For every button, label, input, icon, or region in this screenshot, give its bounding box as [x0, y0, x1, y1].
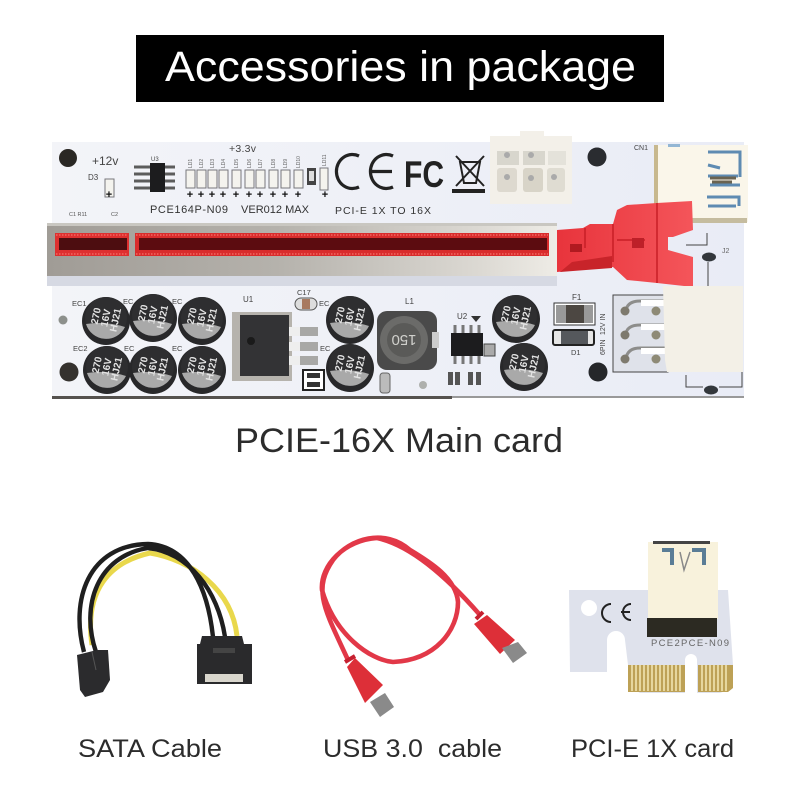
label: USB 3.0 cable: USB 3.0 cable [323, 735, 502, 763]
board silkscreen text: C2 [111, 212, 118, 218]
capacitor EC2: 16V [100, 357, 115, 377]
capacitor EC4 [129, 346, 177, 394]
capacitor EC5: 270 [186, 306, 200, 325]
LED row [105, 168, 328, 201]
board silkscreen text: F1 [572, 293, 582, 302]
capacitor EC10: 16V [517, 354, 532, 374]
capacitor EC4: 16V [146, 357, 161, 377]
capacitor EC1: 270 [90, 306, 104, 325]
board silkscreen text: LD6 [247, 159, 253, 168]
chip U3 [134, 163, 175, 192]
board silkscreen text: D3 [88, 173, 99, 182]
inductor L1: 150 [391, 331, 417, 348]
board silkscreen text: EC2 [73, 344, 88, 353]
capacitor EC2: 270 [91, 355, 105, 374]
PCI-E 1X card illustration [569, 541, 733, 694]
LED row: + [187, 189, 193, 201]
capacitor EC9 [492, 295, 540, 343]
LED row: + [257, 189, 263, 201]
board silkscreen text [69, 143, 730, 357]
title banner [136, 35, 664, 102]
capacitor EC5: HJ21 [204, 307, 220, 333]
LED row: + [209, 189, 215, 201]
capacitor EC7: HJ21 [352, 306, 368, 332]
board silkscreen text: D1 [571, 348, 581, 357]
capacitor EC10 [500, 343, 548, 391]
capacitor EC8: HJ21 [352, 354, 368, 380]
capacitor EC5 [178, 297, 226, 345]
capacitor EC3: 16V [146, 305, 161, 325]
capacitor EC9: HJ21 [518, 305, 534, 331]
board silkscreen text: LD11 [322, 154, 328, 166]
LED row: + [322, 189, 328, 201]
USB 3.0 port [654, 144, 748, 223]
red looped cable [322, 538, 480, 662]
capacitor EC7: 270 [334, 305, 348, 324]
board silkscreen text: EC [172, 297, 183, 306]
board silkscreen text: C17 [297, 288, 311, 297]
title banner: Accessories in package [165, 43, 636, 91]
capacitor EC1: HJ21 [108, 307, 124, 333]
6-pin plug [77, 650, 110, 697]
CE mark [602, 604, 631, 622]
board silkscreen text: C1 R11 [69, 212, 87, 218]
circuit board [52, 142, 744, 399]
board silkscreen text: EC [123, 297, 134, 306]
board silkscreen text: +12v [92, 154, 118, 168]
chip U2 [451, 316, 483, 364]
board silkscreen text: EC [320, 344, 331, 353]
right USB plug [474, 612, 527, 663]
capacitor EC7: 16V [343, 307, 358, 327]
board silkscreen text: LD9 [283, 159, 289, 168]
board silkscreen text: J2 [722, 248, 730, 255]
board silkscreen text: VER012 MAX [241, 204, 310, 216]
board silkscreen text: U1 [243, 295, 254, 304]
capacitor EC5: 16V [195, 308, 210, 328]
capacitor EC6 [178, 346, 226, 394]
capacitor EC9: 16V [509, 306, 524, 326]
LED row: + [198, 189, 204, 201]
board silkscreen text: LD7 [258, 159, 264, 168]
fuse F1 and diode D1 [553, 303, 595, 345]
gold fingers [628, 665, 733, 692]
capacitor array [82, 294, 548, 394]
6-pin power connector top [490, 131, 572, 204]
mounting hole [581, 600, 597, 616]
board silkscreen text: U2 [457, 312, 468, 321]
left USB plug [345, 656, 394, 717]
MOSFET U1 [232, 312, 318, 381]
USB 3.0 cable illustration [322, 538, 527, 717]
board silkscreen text: EC [319, 299, 330, 308]
PCIe x16 slot [47, 223, 557, 286]
capacitor EC3: 270 [137, 303, 151, 322]
board silkscreen text: LD4 [221, 159, 227, 168]
board silkscreen text: CN1 [634, 145, 648, 152]
board silkscreen text: LD3 [210, 159, 216, 168]
board silkscreen text: +3.3v [229, 143, 257, 155]
black wires [80, 544, 225, 652]
capacitor EC6: 270 [186, 355, 200, 374]
8-pin side power connector [613, 286, 743, 372]
LED row: + [246, 189, 252, 201]
label: PCI-E 1X card: PCI-E 1X card [571, 735, 734, 763]
board silkscreen text: 12V IN [600, 314, 607, 335]
capacitor EC2: HJ21 [109, 356, 125, 382]
board silkscreen text: U3 [151, 157, 159, 163]
LED row: + [270, 189, 276, 201]
riser silkscreen: PCE2PCE-N09 [651, 638, 729, 649]
capacitor EC8 [326, 344, 374, 392]
board silkscreen text: LD1 [188, 159, 194, 168]
board silkscreen text: LD5 [234, 159, 240, 168]
USB socket [647, 541, 718, 637]
notch [685, 654, 697, 694]
certification marks CE FC WEEE: FC [404, 154, 444, 195]
capacitor EC6: 16V [195, 357, 210, 377]
capacitor EC10: HJ21 [526, 353, 542, 379]
capacitor EC2 [83, 346, 131, 394]
SATA plug [197, 636, 252, 684]
capacitor EC3 [129, 294, 177, 342]
certification marks CE FC WEEE [336, 154, 485, 195]
capacitor EC10: 270 [508, 352, 522, 371]
board silkscreen text: PCI-E 1X TO 16X [335, 205, 431, 217]
LED row: + [233, 189, 239, 201]
capacitor EC4: HJ21 [155, 356, 171, 382]
SATA cable illustration [77, 544, 252, 697]
board silkscreen text: EC [124, 344, 135, 353]
LED row: + [295, 189, 301, 201]
riser board [569, 590, 733, 693]
capacitor EC6: HJ21 [204, 356, 220, 382]
LED row: + [106, 189, 112, 201]
capacitor EC8: 16V [343, 355, 358, 375]
capacitor EC7 [326, 296, 374, 344]
yellow wires [91, 553, 237, 645]
capacitor EC1: 16V [99, 308, 114, 328]
small resistor pads [295, 298, 495, 393]
capacitor EC3: HJ21 [155, 304, 171, 330]
inductor L1 [377, 311, 439, 370]
board silkscreen text: 6PIN [600, 339, 607, 355]
board silkscreen text: LD10 [296, 156, 302, 168]
heading: main card label: PCIE-16X Main card [235, 422, 563, 460]
capacitor EC4: 270 [137, 355, 151, 374]
LED row: + [282, 189, 288, 201]
board silkscreen text: EC1 [72, 299, 87, 308]
label: SATA Cable: SATA Cable [78, 735, 222, 763]
board silkscreen text: EC [172, 344, 183, 353]
capacitor EC8: 270 [334, 353, 348, 372]
panel: PCIE-16X main card photo [47, 131, 748, 399]
board silkscreen text: LD2 [199, 159, 205, 168]
board silkscreen text: PCE164P-N09 [150, 204, 228, 216]
capacitor EC9: 270 [500, 304, 514, 323]
red slot latch [557, 201, 693, 287]
LED row: + [220, 189, 226, 201]
board silkscreen text: LD8 [271, 159, 277, 168]
capacitor EC1 [82, 297, 130, 345]
board silkscreen text: L1 [405, 297, 414, 306]
